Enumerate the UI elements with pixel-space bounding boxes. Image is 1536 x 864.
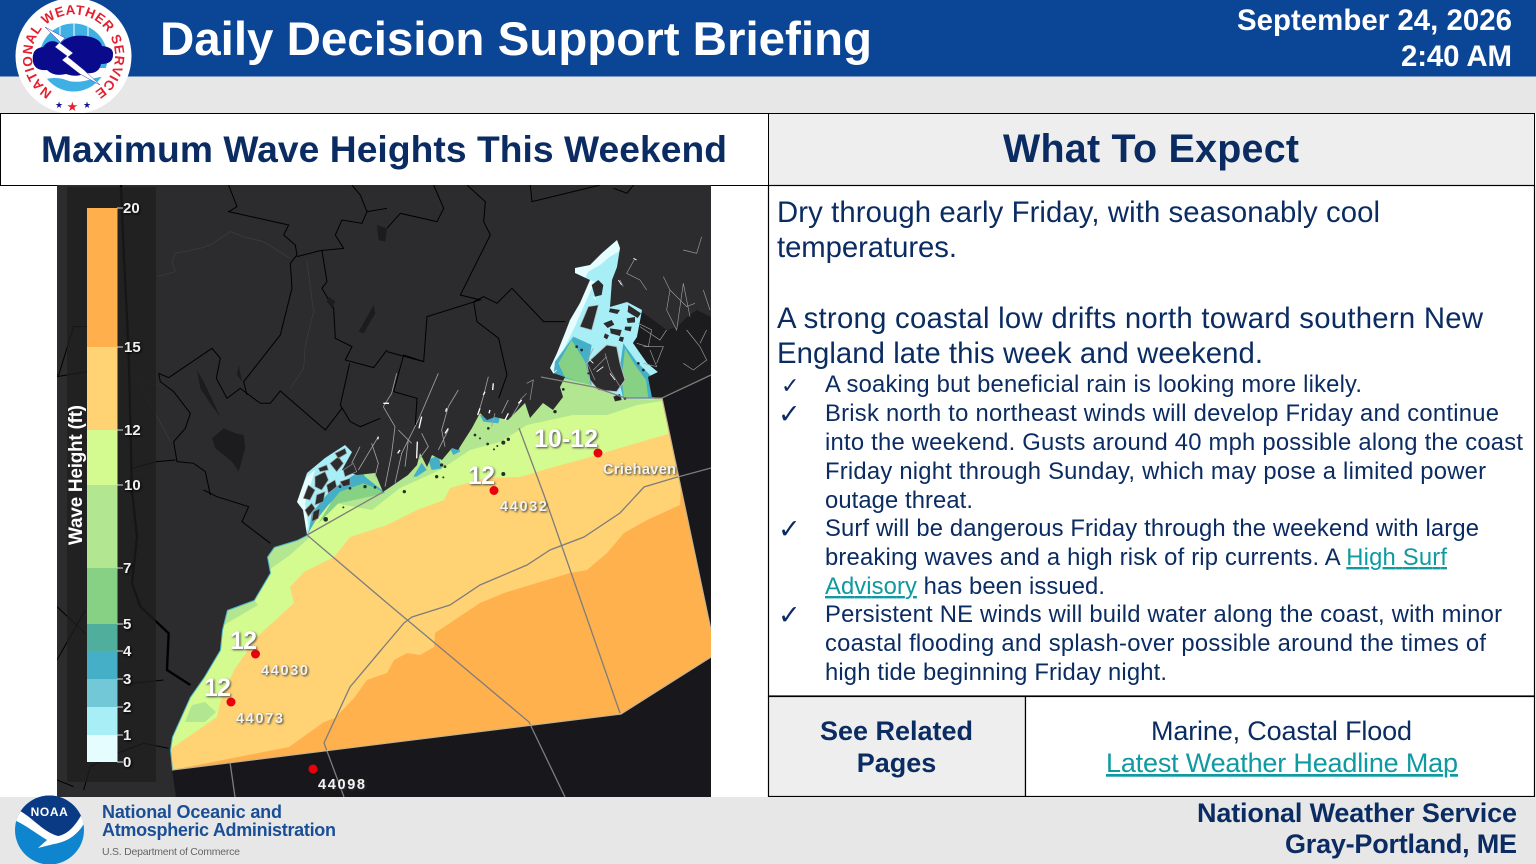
wave height labels xyxy=(204,425,598,702)
panel: related links xyxy=(1026,696,1534,796)
panel: what to expect text xyxy=(768,186,1534,696)
7 to 10 ft zones xyxy=(338,378,662,510)
icon: NOAA logo xyxy=(14,795,86,864)
legend ticks and labels: 1 xyxy=(123,727,131,744)
wave height labels: 12 xyxy=(230,627,257,655)
icon: National Weather Service logo: ★ xyxy=(66,99,78,114)
buoy labels: 44032 xyxy=(500,499,547,515)
legend ticks and labels: 2 xyxy=(123,699,131,716)
date and time: September 24, 2026 xyxy=(1237,4,1512,37)
wave height labels: 12 xyxy=(204,674,231,702)
date and time: 2:40 AM xyxy=(1401,40,1512,73)
bullet: winds: into the weekend. Gusts around 40 mph possible along the coast xyxy=(825,429,1523,456)
buoy labels: 44098 xyxy=(318,777,365,793)
buoy labels: Criehaven xyxy=(603,462,676,478)
west bay shallow water xyxy=(297,415,500,536)
eastern offshore waters beyond the forecast area xyxy=(633,310,711,398)
legend ticks and labels: 20 xyxy=(123,200,140,217)
legend ticks and labels: 5 xyxy=(123,616,131,633)
bullet: rain: A soaking but beneficial rain is looking more likely. xyxy=(825,371,1362,398)
bullet: coastal flooding: Persistent NE winds will build water along the coast, with minor xyxy=(825,601,1502,628)
bullet: coastal flooding: coastal flooding and splash-over possible around the times of xyxy=(825,630,1486,657)
faint state and river lines xyxy=(140,232,314,442)
legend ticks and labels: 7 xyxy=(123,560,131,577)
bullet: winds: Friday night through Sunday, which may pose a limited power xyxy=(825,458,1486,485)
intro text: A strong coastal low drifts north toward southern New xyxy=(777,302,1484,335)
bullet: coastal flooding: ✓ xyxy=(778,600,801,631)
marine zone boundary lines xyxy=(172,375,711,797)
land xyxy=(57,185,711,797)
bullet: winds xyxy=(778,399,1523,514)
buoy labels xyxy=(236,462,676,793)
legend ticks and labels xyxy=(117,200,141,771)
legend ticks and labels: 12 xyxy=(124,422,141,439)
bullet: coastal flooding: high tide beginning Friday night. xyxy=(825,659,1167,686)
12 to 15 ft zone xyxy=(171,432,681,770)
intro text: temperatures. xyxy=(777,231,957,264)
office name: Gray-Portland, ME xyxy=(1285,829,1517,859)
panel: what to expect heading xyxy=(768,114,1534,186)
header banner xyxy=(0,0,1536,76)
legend ticks and labels: 15 xyxy=(124,339,141,356)
bullet: surf: Advisory has been issued. xyxy=(825,573,1105,600)
NOAA wordmark: U.S. Department of Commerce xyxy=(102,846,240,858)
bullet: winds: ✓ xyxy=(778,399,801,430)
office name xyxy=(1197,798,1517,859)
panel: map heading: Maximum Wave Heights This Weekend xyxy=(41,128,727,170)
buoy labels: 44073 xyxy=(236,711,283,727)
lakes xyxy=(197,225,387,472)
bullet: surf xyxy=(778,514,1479,600)
coastal fringe xyxy=(170,535,307,770)
NOAA wordmark xyxy=(102,802,336,858)
legend ticks and labels: 0 xyxy=(123,754,131,771)
intro text xyxy=(777,196,1484,370)
icon: National Weather Service logo: ★ xyxy=(55,100,63,110)
footer band xyxy=(0,795,1536,864)
legend ticks and labels: 4 xyxy=(123,643,132,660)
panel: see related pages: See Related xyxy=(820,716,973,746)
panel: related links: Marine, Coastal Flood xyxy=(1151,716,1412,746)
NOAA wordmark: National Oceanic and xyxy=(102,802,282,822)
legend title: Wave Height (ft) xyxy=(66,405,87,545)
title: Daily Decision Support Briefing xyxy=(160,13,872,66)
10 to 12 ft zone xyxy=(171,401,668,748)
wave height labels: 10-12 xyxy=(534,425,598,453)
panel: related links: Latest Weather Headline Map xyxy=(1106,748,1458,778)
icon: National Weather Service logo: ★ xyxy=(83,100,91,110)
bullet: rain: ✓ xyxy=(781,374,799,399)
panel: see related pages xyxy=(768,696,1026,796)
legend colour bar xyxy=(87,208,118,762)
bullet: coastal flooding xyxy=(778,600,1502,686)
bullet: surf: ✓ xyxy=(778,514,801,545)
office name: National Weather Service xyxy=(1197,798,1517,828)
icon: NOAA logo: NOAA xyxy=(31,805,68,819)
upper bay shallow water xyxy=(548,237,665,400)
legend ticks and labels: 3 xyxy=(123,671,131,688)
panel: map heading xyxy=(0,114,768,186)
panel: what to expect heading: What To Expect xyxy=(1003,127,1299,171)
islands and fjord detail xyxy=(520,237,710,413)
intro text: Dry through early Friday, with seasonably cool xyxy=(777,196,1380,229)
intro text: England late this week and weekend. xyxy=(777,337,1263,370)
panel: see related pages: Pages xyxy=(857,748,936,778)
bullet: winds: Brisk north to northeast winds will develop Friday and continue xyxy=(825,400,1499,427)
buoy markers xyxy=(226,448,602,774)
bullet: surf: Surf will be dangerous Friday through the weekend with large xyxy=(825,515,1479,542)
bullet: surf: breaking waves and a high risk of rip currents. A High Surf xyxy=(825,544,1447,571)
county lines xyxy=(57,185,634,790)
chart: maximum wave height map xyxy=(57,185,711,797)
date and time xyxy=(1237,4,1512,73)
legend panel xyxy=(66,187,156,782)
wave height labels: 12 xyxy=(468,462,495,490)
bullet: winds: outage threat. xyxy=(825,487,973,514)
NOAA wordmark: Atmospheric Administration xyxy=(102,820,336,840)
buoy labels: 44030 xyxy=(261,663,308,679)
icon: National Weather Service logo: NATIONAL WEATHER SERVICE xyxy=(22,5,124,99)
legend ticks and labels: 10 xyxy=(124,477,141,494)
